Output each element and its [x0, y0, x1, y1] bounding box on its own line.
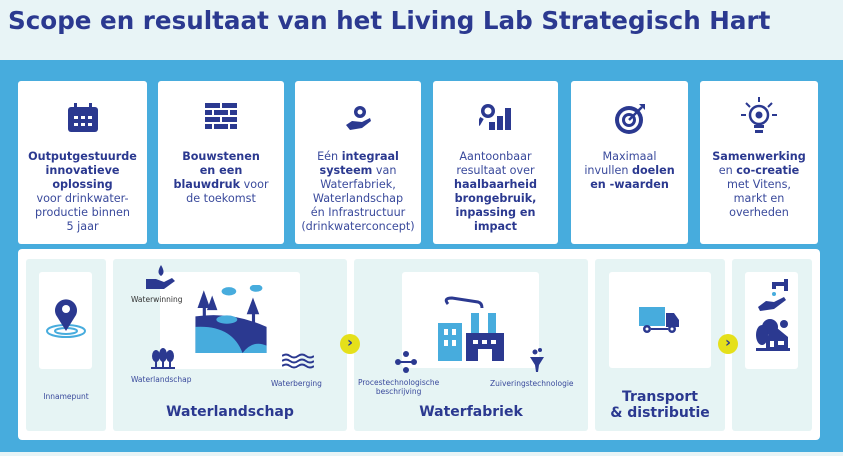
- heading: transport: & distributie: [610, 405, 710, 421]
- icon: waves: [282, 354, 314, 368]
- card: samenwerking: markt en: [734, 192, 784, 205]
- card: integraal systeem: én Infrastructuur: [311, 206, 405, 219]
- card: doelen: en -waarden: [590, 178, 669, 191]
- card: bouwstenen: [158, 81, 284, 244]
- panel: value chain: [18, 249, 820, 440]
- icon: lightbulb: [741, 97, 777, 133]
- card: bouwstenen: Bouwstenen: [182, 150, 260, 163]
- card: outputgestuurde: Outputgestuurde innovatieve oplossing: [28, 150, 137, 191]
- card: aantoonbaar: inpassing en: [456, 206, 535, 219]
- card: samenwerking: Samenwerking: [712, 150, 806, 163]
- label: waterlandschap small: Waterlandschap: [131, 375, 192, 384]
- icon: filter: [530, 348, 544, 372]
- icon: factory: [438, 296, 504, 361]
- label: procestechnologische: Procestechnologische: [358, 378, 439, 387]
- icon: landscape: [195, 285, 267, 353]
- icon: target: [615, 104, 645, 134]
- icon: calendar: [68, 103, 98, 132]
- card: outputgestuurde: [18, 81, 147, 244]
- card: aantoonbaar: Aantoonbaar: [459, 150, 532, 163]
- card: outputgestuurde: productie binnen: [35, 206, 130, 219]
- card: aantoonbaar: resultaat over: [456, 164, 535, 177]
- icon: trees: [151, 348, 175, 369]
- icon: process nodes: [395, 351, 417, 373]
- arrow: yellow 2: ›: [725, 335, 731, 351]
- panel: waterlandschap: [113, 259, 347, 431]
- card: outputgestuurde: voor drinkwater-: [36, 192, 129, 205]
- card: doelen: invullen doelen: [584, 164, 675, 177]
- card: aantoonbaar: haalbaarheid: [454, 178, 537, 191]
- icon: waterwinning hand: [146, 265, 175, 289]
- heading: transport: [610, 389, 710, 421]
- card: integraal systeem: Waterlandschap: [313, 192, 403, 205]
- card: integraal systeem: Eén integraal: [317, 150, 399, 163]
- card: aantoonbaar: brongebruik,: [455, 192, 536, 205]
- card: samenwerking: en co-creatie: [719, 164, 799, 177]
- arrow: yellow 1: [340, 334, 360, 354]
- icon: location pin: [46, 299, 86, 338]
- icon: bricks: [205, 103, 237, 129]
- icon: magnifier chart: [479, 104, 511, 130]
- panel: transport: [595, 259, 725, 431]
- card: integraal systeem: systeem van: [320, 164, 396, 177]
- arrow: yellow 2: [718, 334, 738, 354]
- arrow: yellow 1: ›: [347, 335, 353, 351]
- title: Scope en resultaat van het Living Lab Strategisch Hart: [8, 6, 770, 35]
- panel: eindgebruik: [732, 259, 812, 431]
- card: integraal systeem: Waterfabriek,: [320, 178, 396, 191]
- card: doelen: Maximaal: [603, 150, 656, 163]
- card: outputgestuurde: 5 jaar: [66, 220, 99, 233]
- card: doelen: [571, 81, 688, 244]
- heading: waterfabriek: Waterfabriek: [419, 404, 523, 420]
- label: innamepunt: Innamepunt: [43, 392, 89, 401]
- label: procestechnologische: [358, 378, 439, 396]
- card: samenwerking: met Vitens,: [727, 178, 791, 191]
- label: waterberging: Waterberging: [271, 379, 322, 388]
- card: integraal systeem: (drinkwaterconcept): [301, 220, 415, 233]
- card: bouwstenen: blauwdruk voor: [173, 178, 269, 191]
- label: zuiveringstechnologie: Zuiveringstechnologie: [490, 379, 574, 388]
- card: aantoonbaar: [433, 81, 558, 244]
- icon: hand with gear: [346, 106, 371, 130]
- heading: transport: Transport: [622, 389, 698, 405]
- card: integraal systeem: [295, 81, 421, 244]
- icon: truck: [639, 307, 679, 333]
- heading: waterlandschap: Waterlandschap: [166, 404, 294, 420]
- card: bouwstenen: de toekomst: [186, 192, 256, 205]
- card: samenwerking: overheden: [729, 206, 789, 219]
- card: aantoonbaar: impact: [474, 220, 517, 233]
- panel: waterfabriek: [354, 259, 588, 431]
- label: waterwinning: Waterwinning: [131, 295, 182, 304]
- panel: innamepunt: [26, 259, 106, 431]
- label: procestechnologische: beschrijving: [376, 387, 421, 396]
- icon: tap hand: [758, 279, 788, 311]
- icon: house trees: [756, 319, 790, 351]
- card: samenwerking: [700, 81, 818, 244]
- card: bouwstenen: en een: [200, 164, 242, 177]
